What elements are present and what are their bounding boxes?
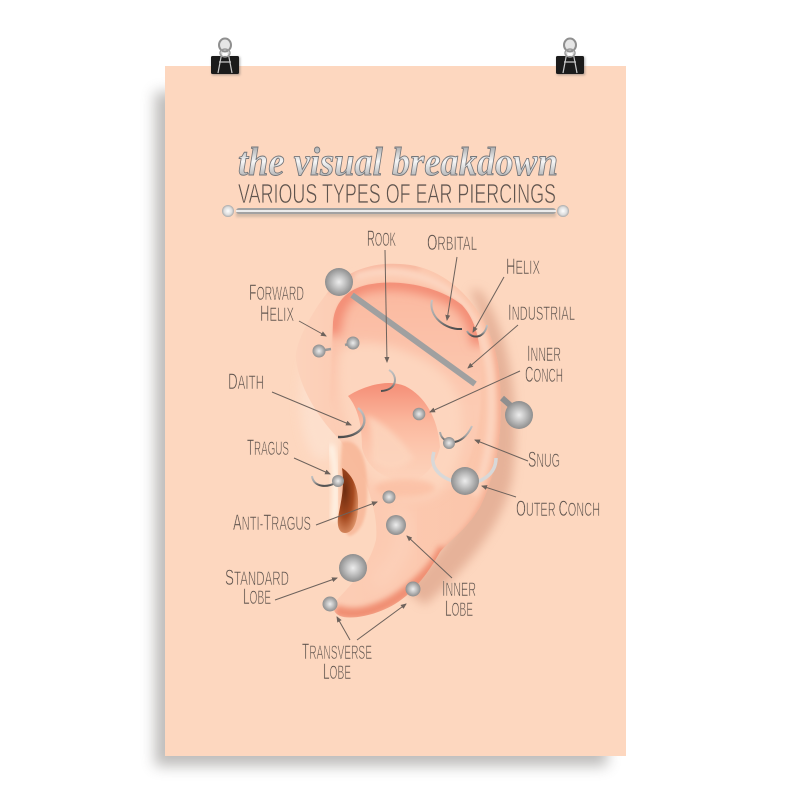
piercing: snug	[440, 426, 472, 449]
arrow: inner conch	[430, 371, 520, 412]
arrow: standard lobe	[275, 578, 337, 600]
piercing: rook ring	[381, 370, 395, 391]
title barbell divider	[222, 205, 569, 217]
piercing: daith ring	[338, 408, 364, 437]
right rim shade	[444, 325, 501, 546]
poster shadow	[155, 92, 607, 766]
arrow: forward helix	[299, 321, 326, 336]
concha highlight	[366, 415, 414, 469]
subtitle: VARIOUS TYPES OF EAR PIERCINGS	[238, 178, 556, 209]
label: forward helix: HELIX	[260, 301, 294, 326]
arrow: outer conch	[482, 486, 516, 497]
label: transverse lobe: TRANSVERSE	[302, 639, 372, 664]
label: outer conch: OUTER CONCH	[516, 496, 600, 521]
arrow: rook	[385, 250, 387, 362]
label: standard lobe: LOBE	[243, 584, 271, 609]
top rim shade	[350, 264, 420, 278]
label: transverse lobe: LOBE	[323, 659, 351, 684]
piercing: transverse lobe	[322, 582, 420, 612]
label: inner lobe: INNER	[442, 576, 476, 601]
concha-to-lobe blend	[375, 479, 435, 497]
piercing: helix ring	[467, 325, 487, 337]
piercing: tragus	[312, 475, 344, 487]
left lobe light	[375, 510, 405, 585]
piercing: outer conch	[433, 452, 496, 495]
piercing: standard lobe	[339, 554, 367, 582]
label: inner conch: INNER	[527, 341, 561, 366]
arrow: helix	[473, 277, 504, 332]
arrows: transverse lobe	[337, 604, 406, 640]
label: helix: HELIX	[506, 254, 540, 279]
helix bright rim	[355, 272, 491, 495]
ear shading clipped to outline	[330, 265, 502, 613]
label: standard lobe	[225, 565, 289, 609]
piercing: anti-tragus	[382, 490, 396, 504]
label: industrial: INDUSTRIAL	[508, 300, 575, 325]
label: inner lobe	[442, 576, 476, 621]
label: tragus: TRAGUS	[247, 435, 289, 460]
label: forward helix	[249, 280, 304, 326]
arrow: tragus	[294, 458, 330, 474]
ear illustration	[296, 264, 515, 618]
arrow: inner lobe	[407, 536, 452, 578]
label: inner conch	[525, 341, 563, 387]
poster sheet	[165, 66, 626, 756]
piercing: inner lobe	[386, 515, 406, 535]
label: snug: SNUG	[528, 447, 560, 472]
binder clip right	[556, 38, 585, 75]
ear cast shadow	[405, 290, 515, 605]
label: transverse lobe	[302, 639, 372, 684]
label: orbital: ORBITAL	[427, 230, 477, 255]
outer ear	[296, 264, 501, 618]
lobe bottom shade	[335, 548, 444, 613]
arrow: daith	[272, 392, 351, 425]
tragus surround	[340, 441, 367, 536]
piercing: forward helix	[312, 336, 360, 358]
label: rook: ROOK	[367, 226, 396, 251]
scapha hollow	[330, 283, 481, 490]
binder clip left	[211, 38, 240, 75]
title: the visual breakdown	[238, 139, 558, 184]
label: anti-tragus: ANTI-TRAGUS	[233, 510, 311, 535]
arrow: industrial	[468, 325, 518, 368]
piercing: orbital ring	[431, 300, 462, 329]
label: inner lobe: LOBE	[445, 596, 473, 621]
tragus highlight	[331, 445, 336, 520]
concha	[348, 383, 440, 482]
arrow: anti-tragus	[316, 502, 377, 525]
piercing: industrial barbell	[325, 268, 533, 429]
label: daith: DAITH	[228, 369, 264, 394]
poster infographic	[147, 38, 626, 774]
arrow: orbital	[447, 257, 457, 320]
label: forward helix: FORWARD	[249, 280, 304, 305]
label: inner conch: CONCH	[525, 362, 563, 387]
scapha inner coral edge	[333, 283, 479, 345]
piercing: inner conch	[413, 408, 425, 420]
label: standard lobe: STANDARD	[225, 565, 289, 590]
antihelix light band	[338, 343, 463, 499]
head glow near ear	[300, 340, 344, 460]
arrow: snug	[475, 440, 528, 461]
ear canal	[338, 468, 358, 533]
